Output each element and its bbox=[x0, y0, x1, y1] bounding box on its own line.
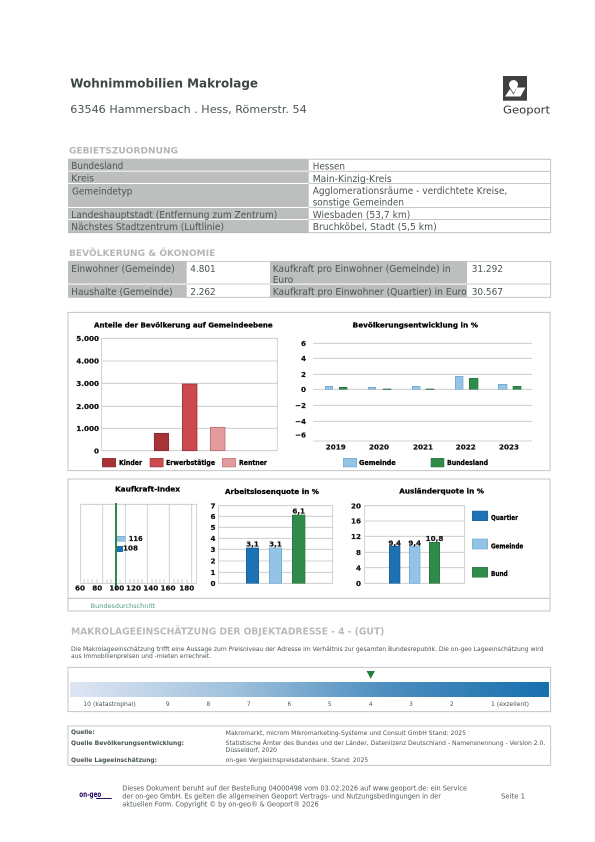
panel: Gebietszuordnung table: sonstige Gemeinden bbox=[313, 197, 404, 208]
chart: Bevölkerungsentwicklung in %: 6 bbox=[301, 339, 306, 348]
chart: Bevölkerungsentwicklung in %: 4 bbox=[301, 354, 306, 363]
panel: location rating scale: 7 bbox=[247, 702, 251, 708]
legend: Quartier, Gemeinde, Bund: Gemeinde bbox=[491, 542, 524, 550]
text block: footer note: Dieses Dokument beruht auf der Bestellung 04000498 vom 03.02.2026 auf www.geoport.de: ein Service bbox=[122, 785, 467, 793]
chart: Ausländerquote in %: 8 bbox=[356, 548, 361, 557]
chart: Ausländerquote in %: 16 bbox=[351, 517, 361, 526]
chart: Anteile der Bevölkerung auf Gemeindeebene: Kinder bbox=[119, 459, 143, 467]
chart: Anteile der Bevölkerung auf Gemeindeebene: 4.000 bbox=[76, 357, 99, 366]
chart: Anteile der Bevölkerung auf Gemeindeebene: 0 bbox=[94, 446, 99, 455]
panel: Gebietszuordnung table: Wiesbaden (53,7 km) bbox=[313, 210, 410, 221]
chart: Kaufkraft-Index bbox=[75, 486, 197, 593]
panel: sources: Düsseldorf, 2020 bbox=[226, 748, 277, 754]
panel: location rating scale: 8 bbox=[206, 702, 210, 708]
panel: Bevölkerung und Ökonomie table bbox=[68, 261, 551, 298]
chart: Anteile der Bevölkerung auf Gemeindeebene: Erwerbstätige bbox=[166, 459, 215, 467]
panel: sources: on-geo Vergleichspreisdatenbank. Stand: 2025 bbox=[226, 758, 369, 764]
chart: Arbeitslosenquote in %: 3 bbox=[210, 545, 216, 554]
chart: Bevölkerungsentwicklung in %: Bundesland bbox=[447, 459, 488, 467]
panel: sources bbox=[68, 726, 551, 765]
chart: Bevölkerungsentwicklung in %: 2023 bbox=[499, 442, 519, 451]
panel: Gebietszuordnung table: Hessen bbox=[313, 161, 345, 172]
chart: Bevölkerungsentwicklung in %: 2022 bbox=[456, 442, 476, 451]
panel: location rating scale: 4 bbox=[369, 702, 373, 708]
chart: Arbeitslosenquote in %: 1 bbox=[210, 568, 216, 577]
text block: explanation bbox=[71, 647, 544, 660]
panel: sources: Quelle Bevölkerungsentwicklung: bbox=[71, 741, 184, 747]
heading: Makrolageeinschätzung: MAKROLAGEEINSCHÄTZUNG DER OBJEKTADRESSE - 4 - (GUT) bbox=[71, 623, 384, 637]
chart: Anteile der Bevölkerung auf Gemeindeebene: 3.000 bbox=[76, 379, 99, 388]
chart: Anteile der Bevölkerung auf Gemeindeebene: Rentner bbox=[239, 459, 268, 467]
panel: Bevölkerung und Ökonomie table: Kaufkraft pro Einwohner (Quartier) in Euro bbox=[273, 287, 467, 298]
panel: Gebietszuordnung table: Gemeindetyp bbox=[72, 187, 132, 198]
chart: Bevölkerungsentwicklung in %: Gemeinde bbox=[359, 459, 396, 467]
panel: sources: Quelle: bbox=[71, 730, 95, 736]
chart: Arbeitslosenquote in %: 2 bbox=[210, 557, 216, 566]
panel: Gebietszuordnung table: Kreis bbox=[71, 174, 94, 185]
chart: Bevölkerungsentwicklung in %: 2021 bbox=[413, 442, 433, 451]
text block: explanation: Die Makrolageeinschätzung trifft eine Aussage zum Preisniveau der Adresse im Verhältnis zur gesamten Bundesrepublik. Die on-geo Lageeinschätzung wird bbox=[71, 647, 544, 653]
chart: Kaufkraft-Index: Kaufkraft-Index bbox=[115, 486, 181, 494]
chart: Arbeitslosenquote in %: 7 bbox=[210, 502, 216, 510]
chart: Bevölkerungsentwicklung in %: 2020 bbox=[369, 442, 389, 451]
heading: Gebietszuordnung: GEBIETSZUORDNUNG bbox=[69, 146, 178, 156]
chart: Anteile der Bevölkerung auf Gemeindeebene: Anteile der Bevölkerung auf Gemeindeebene bbox=[94, 321, 273, 329]
text block: footer note: aktuellen Form. Copyright © by on-geo® & Geoport® 2026 bbox=[122, 801, 319, 809]
chart: Bevölkerungsentwicklung in %: −4 bbox=[295, 417, 306, 426]
panel: sources: Makromarkt, microm Mikromarketing-Systeme und Consult GmbH Stand: 2025 bbox=[226, 731, 466, 737]
address subtitle: 63546 Hammersbach . Hess, Römerstr. 54 bbox=[70, 103, 307, 116]
logo: on-geo: on-geo bbox=[79, 790, 101, 799]
page number: Seite 1 bbox=[501, 793, 525, 801]
chart: Kaufkraft-Index: 160 bbox=[160, 584, 176, 593]
legend: Quartier, Gemeinde, Bund bbox=[472, 511, 524, 578]
panel: Bevölkerung und Ökonomie table: Euro bbox=[273, 275, 294, 286]
panel: location rating scale: 10 (katastrophal) bbox=[83, 702, 136, 708]
panel: location rating scale: 3 bbox=[409, 702, 413, 708]
chart: Ausländerquote in %: Ausländerquote in % bbox=[399, 487, 484, 495]
chart: Bevölkerungsentwicklung in % bbox=[295, 321, 532, 467]
panel: Bevölkerung und Ökonomie table: Haushalte (Gemeinde) bbox=[71, 287, 173, 298]
chart: Bevölkerungsentwicklung in %: 2019 bbox=[326, 442, 346, 451]
chart: Arbeitslosenquote in %: 3,1 bbox=[246, 540, 259, 548]
panel: Gebietszuordnung table: Bruchköbel, Stadt (5,5 km) bbox=[313, 222, 437, 233]
panel: Gebietszuordnung table: Agglomerationsräume - verdichtete Kreise, bbox=[313, 186, 507, 197]
chart: Ausländerquote in % bbox=[351, 487, 484, 588]
chart: Ausländerquote in %: 0 bbox=[356, 579, 361, 588]
chart: Kaufkraft-Index: 80 bbox=[92, 584, 102, 593]
chart: Bevölkerungsentwicklung in %: Bevölkerungsentwicklung in % bbox=[353, 321, 478, 329]
panel: Bevölkerung und Ökonomie table: Einwohner (Gemeinde) bbox=[71, 264, 175, 275]
panel: Gebietszuordnung table bbox=[68, 159, 551, 233]
chart: Bevölkerungsentwicklung in %: −6 bbox=[295, 430, 306, 440]
legend: Quartier, Gemeinde, Bund: Quartier bbox=[491, 514, 519, 522]
panel: sources: Quelle Lageeinschätzung: bbox=[71, 758, 157, 764]
chart: Anteile der Bevölkerung auf Gemeindeebene bbox=[76, 321, 277, 467]
panel: Gebietszuordnung table: Main-Kinzig-Kreis bbox=[313, 174, 392, 185]
chart: Kaufkraft-Index: 120 bbox=[126, 584, 141, 593]
chart: Kaufkraft-Index: 60 bbox=[75, 584, 85, 593]
chart: Anteile der Bevölkerung auf Gemeindeebene: 1.000 bbox=[76, 424, 99, 433]
chart: Anteile der Bevölkerung auf Gemeindeebene: 2.000 bbox=[76, 402, 99, 411]
chart: Ausländerquote in %: 20 bbox=[351, 501, 361, 510]
panel: location rating scale: 6 bbox=[287, 702, 291, 708]
panel: population charts bbox=[68, 312, 550, 471]
icon: rating marker bbox=[366, 671, 375, 679]
chart: Bevölkerungsentwicklung in %: 0 bbox=[301, 385, 306, 394]
chart: Kaufkraft-Index: 180 bbox=[179, 584, 194, 593]
panel: Gebietszuordnung table: Nächstes Stadtzentrum (Luftlinie) bbox=[71, 222, 224, 233]
chart: Kaufkraft-Index: 108 bbox=[123, 544, 138, 553]
chart: Kaufkraft-Index: 116 bbox=[129, 534, 143, 543]
panel: Gebietszuordnung table: Landeshauptstadt (Entfernung zum Zentrum) bbox=[71, 210, 277, 221]
title: Wohnimmobilien Makrolage bbox=[70, 76, 258, 90]
panel: Bevölkerung und Ökonomie table: 30.567 bbox=[472, 287, 503, 298]
panel: Bevölkerung und Ökonomie table: 31.292 bbox=[472, 264, 503, 275]
chart: Ausländerquote in %: 9,4 bbox=[388, 538, 401, 547]
chart: Arbeitslosenquote in % bbox=[210, 488, 333, 588]
text block: footer note: der on-geo GmbH. Es gelten die allgemeinen Geoport Vertrags- und Nutzungsbedingungen in der bbox=[122, 793, 441, 801]
chart: Ausländerquote in %: 12 bbox=[351, 532, 361, 541]
chart: Arbeitslosenquote in %: 4 bbox=[210, 534, 216, 543]
panel: Bevölkerung und Ökonomie table: 4.801 bbox=[190, 264, 216, 275]
panel: location rating scale: 2 bbox=[450, 702, 454, 708]
chart: Ausländerquote in %: 10,8 bbox=[426, 534, 443, 543]
panel: index and quota charts bbox=[68, 479, 550, 611]
panel: location rating scale: 9 bbox=[166, 702, 170, 708]
chart: Kaufkraft-Index: 100 bbox=[109, 584, 124, 593]
logo: Geoport bbox=[503, 76, 551, 116]
legend: Quartier, Gemeinde, Bund: Bund bbox=[491, 570, 508, 578]
panel: Bevölkerung und Ökonomie table: 2.262 bbox=[190, 287, 216, 298]
panel: location rating scale bbox=[68, 667, 551, 712]
text block: explanation: aus Immobilienpreisen und -mieten errechnet. bbox=[71, 654, 211, 660]
panel: sources: Statistische Ämter des Bundes und der Länder, Datenlizenz Deutschland - Namensnennung - Version 2.0. bbox=[226, 740, 545, 747]
chart: Arbeitslosenquote in %: 0 bbox=[210, 579, 216, 588]
chart: Bevölkerungsentwicklung in %: 2 bbox=[301, 370, 306, 379]
text block: footer note bbox=[122, 785, 467, 809]
heading: Bevölkerung und Ökonomie: BEVÖLKERUNG & ÖKONOMIE bbox=[69, 248, 215, 259]
chart: Ausländerquote in %: 4 bbox=[356, 563, 361, 572]
chart: Arbeitslosenquote in %: 6 bbox=[210, 512, 216, 521]
chart: Ausländerquote in %: 9,4 bbox=[408, 538, 421, 547]
panel: Bevölkerung und Ökonomie table: Kaufkraft pro Einwohner (Gemeinde) in bbox=[273, 264, 451, 275]
chart: Arbeitslosenquote in %: 3,1 bbox=[269, 540, 282, 548]
panel: location rating scale: 5 bbox=[328, 702, 332, 708]
chart: Arbeitslosenquote in %: 6,1 bbox=[292, 506, 305, 516]
panel: Gebietszuordnung table: Bundesland bbox=[71, 161, 123, 172]
chart: Kaufkraft-Index: 140 bbox=[143, 584, 158, 593]
logo: Geoport: Geoport bbox=[503, 104, 551, 116]
chart: Bevölkerungsentwicklung in %: −2 bbox=[295, 401, 306, 410]
panel: location rating scale: 1 (exzellent) bbox=[491, 702, 529, 708]
chart: Anteile der Bevölkerung auf Gemeindeebene: 5.000 bbox=[76, 334, 99, 343]
caption: Bundesdurchschnitt: Bundesdurchschnitt bbox=[91, 603, 156, 610]
chart: Arbeitslosenquote in %: 5 bbox=[210, 523, 216, 532]
chart: Arbeitslosenquote in %: Arbeitslosenquote in % bbox=[225, 488, 319, 496]
